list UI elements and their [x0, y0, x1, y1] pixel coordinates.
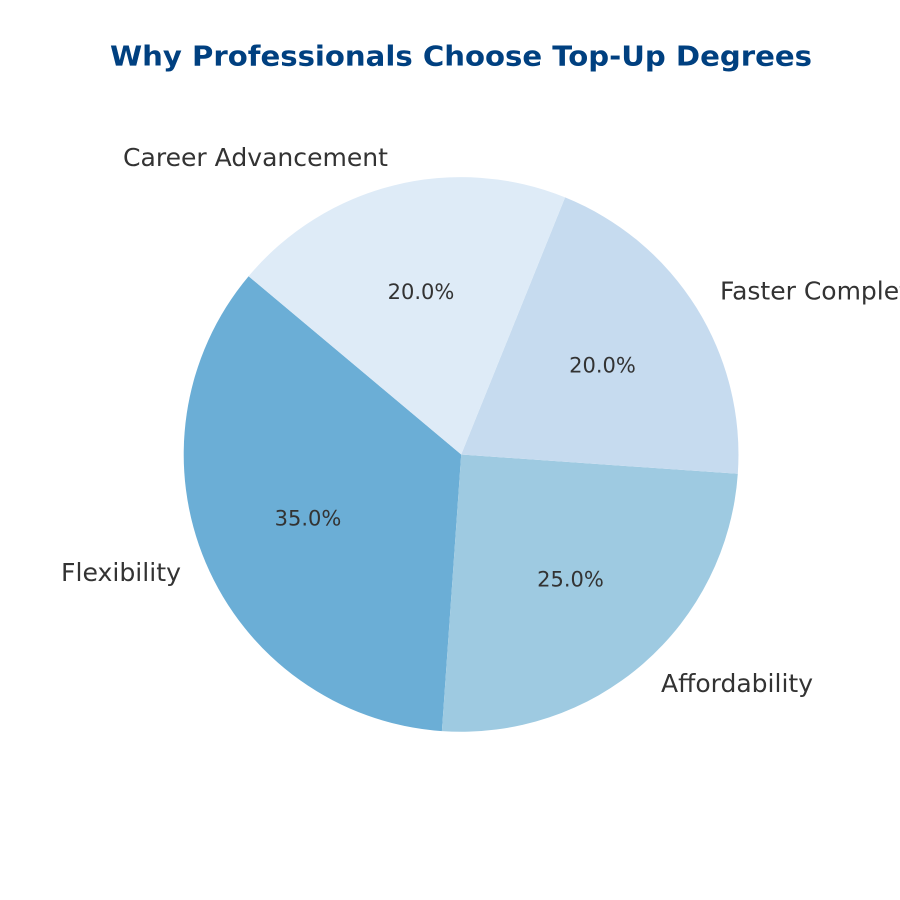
label: Affordability: Affordability: [661, 669, 813, 698]
slice: Flexibility 35%: [184, 276, 461, 731]
slice: Faster Completion 20%: [461, 197, 738, 474]
value: Affordability 25.0%: 25.0%: [537, 568, 604, 592]
title: Why Professionals Choose Top-Up Degrees: [110, 40, 812, 72]
value: Career Advancement 20.0%: 20.0%: [388, 280, 454, 304]
label: Flexibility: Flexibility: [61, 558, 181, 587]
value: Faster Completion 20.0%: 20.0%: [569, 353, 636, 377]
slice: Affordability 25%: [442, 454, 738, 732]
slice: Career Advancement 20%: [249, 177, 565, 455]
pie chart: [184, 177, 738, 732]
value: Flexibility 35.0%: 35.0%: [275, 506, 341, 530]
label: Career Advancement: Career Advancement: [123, 143, 388, 172]
